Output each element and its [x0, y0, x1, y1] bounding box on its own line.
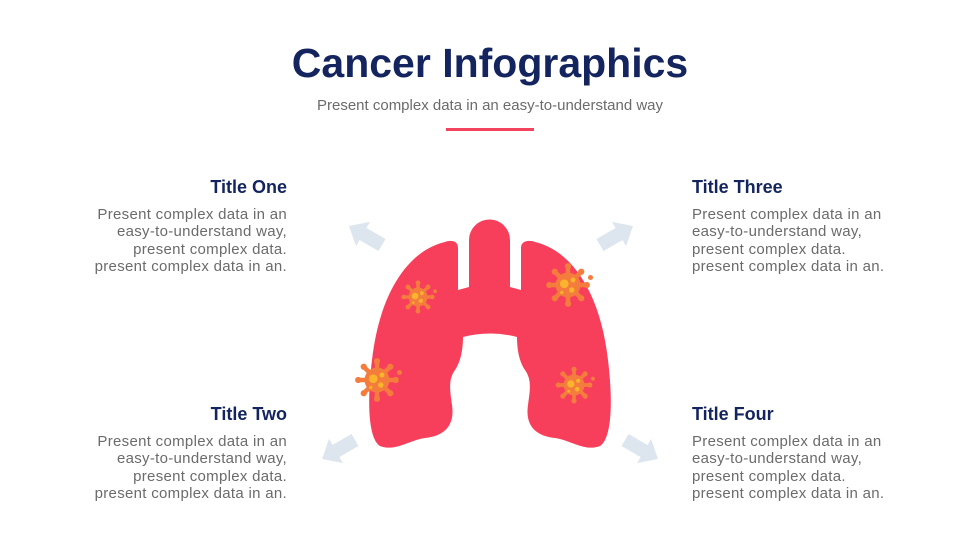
text block: two: easy-to-understand way,	[117, 450, 287, 467]
text block: four	[692, 433, 884, 502]
arrow: top-left	[342, 214, 389, 257]
text block: two	[95, 433, 287, 502]
subtitle: Present complex data in an easy-to-understand way	[317, 97, 663, 114]
text block: four: present complex data.	[692, 468, 846, 485]
text block: three: present complex data in an.	[692, 258, 884, 275]
tumor markers	[355, 263, 595, 403]
text block: one: easy-to-understand way,	[117, 223, 287, 240]
text block: one: Present complex data in an	[97, 206, 287, 223]
arrow: top-right	[593, 214, 640, 257]
text block: three: easy-to-understand way,	[692, 223, 862, 240]
heading: Title Three: Title Three	[692, 177, 783, 197]
arrow: bottom-right	[618, 428, 665, 471]
text block: two: present complex data in an.	[95, 485, 287, 502]
heading: Title Four: Title Four	[692, 404, 774, 424]
lungs shape	[369, 219, 611, 448]
text block: one: present complex data in an.	[95, 258, 287, 275]
text block: one: present complex data.	[133, 241, 287, 258]
red underline	[446, 128, 534, 131]
text block: three: present complex data.	[692, 241, 846, 258]
heading: Title Two: Title Two	[211, 404, 287, 424]
text block: two: Present complex data in an	[97, 433, 287, 450]
text block: three: Present complex data in an	[692, 206, 882, 223]
text block: two: present complex data.	[133, 468, 287, 485]
text block: one	[95, 206, 287, 275]
heading: Title One: Title One	[210, 177, 287, 197]
title: Cancer Infographics	[292, 40, 688, 86]
arrow: bottom-left	[315, 428, 362, 471]
text block: four: present complex data in an.	[692, 485, 884, 502]
text block: three	[692, 206, 884, 275]
text block: four: Present complex data in an	[692, 433, 882, 450]
text block: four: easy-to-understand way,	[692, 450, 862, 467]
